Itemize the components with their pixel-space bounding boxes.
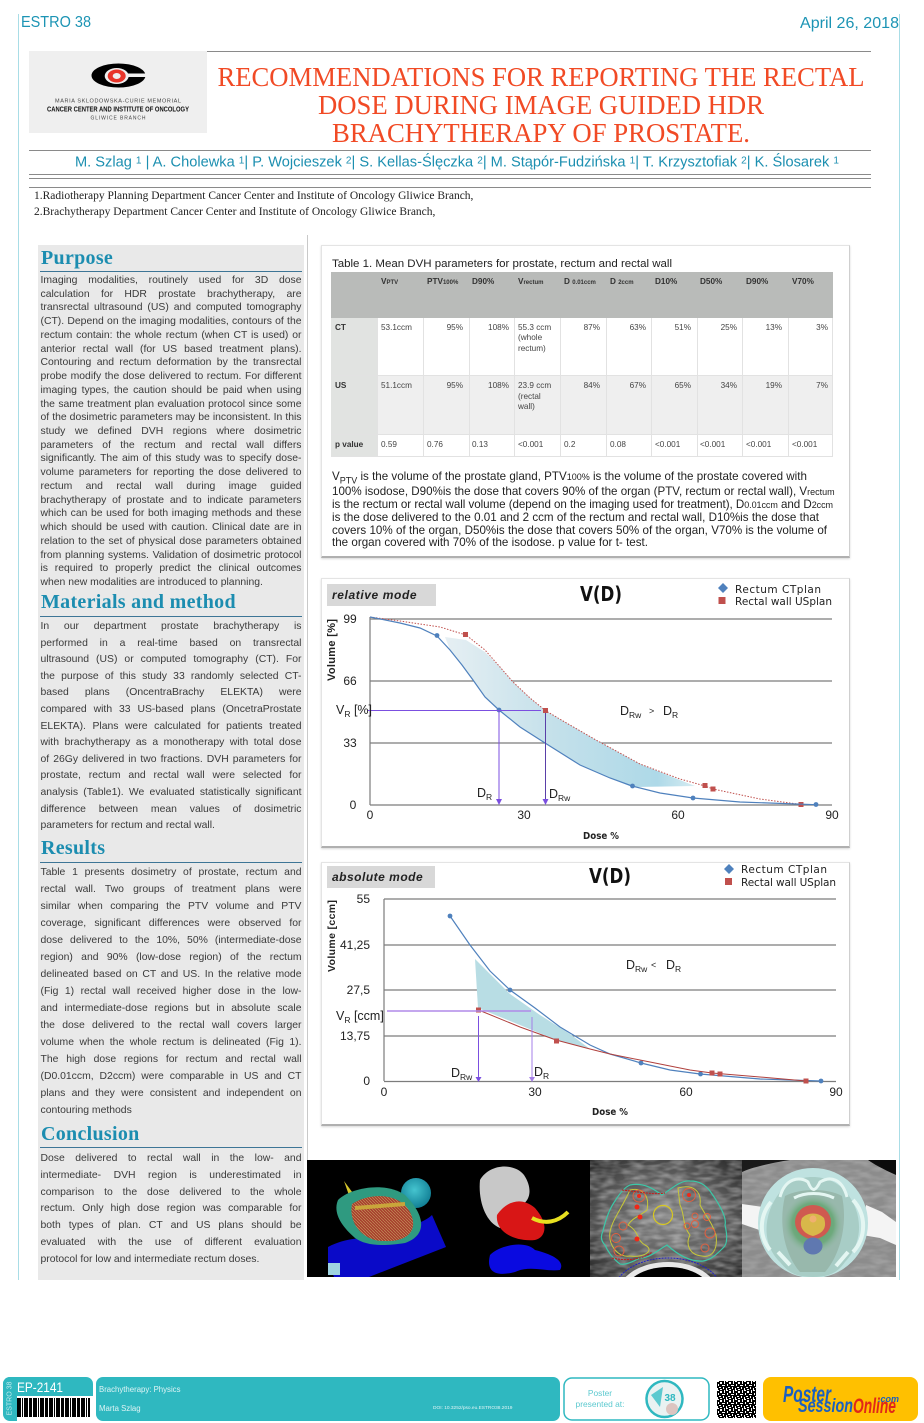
authors: 2 xyxy=(477,156,483,166)
rectum curve xyxy=(448,914,823,1083)
heading: Purpose: Purpose xyxy=(41,247,113,269)
axis labels: 27,5 xyxy=(347,983,370,997)
table 1: (whole xyxy=(518,333,543,342)
chart title: V(D) xyxy=(589,864,631,888)
panel: table 1 xyxy=(321,245,850,558)
text block: Purpose: imaging types, the caution should be paid when using xyxy=(40,385,302,396)
table 1: <0.001 xyxy=(746,440,772,449)
annotations: Rw xyxy=(460,1072,473,1082)
axis labels: 60 xyxy=(679,1085,693,1099)
axis labels: 30 xyxy=(528,1085,542,1099)
poster number: EP-2141 xyxy=(17,1380,63,1395)
table 1: 65% xyxy=(675,381,691,390)
text block: Purpose: relation to the set of physical dose parameters obtained xyxy=(40,536,302,547)
heading: Results: Results xyxy=(41,837,105,859)
text block: Purpose: from planning systems. Validation of dosimetric protocol xyxy=(40,550,302,561)
annotations: D xyxy=(626,958,635,972)
text block: Conclusion: evaluated with the use of different evaluation xyxy=(40,1237,302,1248)
text block: Purpose: of the dosimetric parameters may be inconsistent. In this xyxy=(40,412,302,423)
table 1: 108% xyxy=(488,323,509,332)
authors: | T. Krzysztofiak xyxy=(635,154,741,170)
authors xyxy=(75,152,839,170)
table footnote: 100% isodose, D90%is the dose that covers 90% of the organ (PTV, rectum or rectal wall), Vrectum xyxy=(332,485,835,498)
authors: | M. Stąpór-Fudzińska xyxy=(483,154,630,170)
authors: 1 xyxy=(630,156,636,166)
table 1: D 2ccm xyxy=(610,277,634,286)
affiliations: 2.Brachytherapy Department Cancer Center and Institute of Oncology Gliwice Branch, xyxy=(34,206,435,218)
table footnote: covers 10% of the organ, D50%is the dose that covers 50% of the organ, V70% is the volume of xyxy=(332,524,827,537)
table 1: 25% xyxy=(721,323,737,332)
CT scan with dose overlay xyxy=(742,1160,896,1278)
text block: Results: (D0.01ccm, D2ccm) were comparable in US and CT xyxy=(40,1071,302,1082)
annotations: Rw xyxy=(635,964,648,974)
authors: 2 xyxy=(346,156,352,166)
axis labels xyxy=(326,892,843,1118)
annotations: R xyxy=(543,1071,549,1081)
conference name: ESTRO 38 xyxy=(21,14,91,31)
3D model right xyxy=(480,1167,568,1274)
axis labels: 90 xyxy=(829,1085,843,1099)
footer: topic and author bar: DOI: 10.3252/pso.eu.ESTRO38.2019 xyxy=(433,1406,512,1411)
affiliations: 1.Radiotherapy Planning Department Cancer Center and Institute of Oncology Gliwice Branch, xyxy=(34,190,473,202)
text block: Conclusion: intermediate- DVH region is underestimated in xyxy=(40,1170,302,1181)
text block: Conclusion: comparison to the dose delivered to the whole xyxy=(40,1187,302,1198)
table 1: D10% xyxy=(655,277,678,286)
text block: Materials and method: ultrasound (US) or computed tomography (CT). For xyxy=(40,654,302,665)
table 1: 87% xyxy=(584,323,600,332)
axis labels: 13,75 xyxy=(340,1029,370,1043)
text block: Materials and method: In our department prostate brachytherapy is xyxy=(40,621,302,632)
axis labels: 0 xyxy=(381,1085,388,1099)
axis labels: 41,25 xyxy=(340,938,370,952)
rectal wall curve xyxy=(476,1008,808,1084)
text block: Results: plans and they were consistent and independent on xyxy=(40,1088,302,1099)
authors: | K. Ślosarek xyxy=(747,152,833,170)
axis labels: 60 xyxy=(671,808,685,822)
table 1: 0.13 xyxy=(472,440,488,449)
table 1: <0.001 xyxy=(700,440,726,449)
table 1: CT xyxy=(335,323,346,332)
text block: Results: rectal wall. Two groups of treatment plans were xyxy=(40,884,302,895)
text block: Purpose: the same treatment plan evaluation protocol since some xyxy=(40,399,302,410)
grid and axes xyxy=(384,899,836,1082)
table 1: (rectal xyxy=(518,392,541,401)
annotations: R xyxy=(675,964,681,974)
table 1: 63% xyxy=(630,323,646,332)
table 1: rectum) xyxy=(518,344,546,353)
3D model left xyxy=(328,1178,446,1277)
axis labels: Volume [%] xyxy=(326,619,338,681)
authors: 1 xyxy=(136,156,142,166)
rectal wall curve xyxy=(370,617,804,807)
text block: Materials and method: difference between mean values of dosimetric xyxy=(40,804,302,815)
footer: poster presented at: presented at: xyxy=(576,1399,624,1409)
text block: Purpose: Imaging modalities, routinely used for 3D dose xyxy=(40,275,302,286)
table 1: <0.001 xyxy=(518,440,544,449)
date: April 26, 2018 xyxy=(800,15,899,32)
authors: 2 xyxy=(741,156,747,166)
panel: left text column xyxy=(38,245,304,1280)
grid and axes xyxy=(370,617,832,805)
annotations: R xyxy=(344,709,350,719)
id block background xyxy=(3,1377,93,1396)
axis labels: Volume [ccm] xyxy=(326,900,338,972)
text block: Purpose: Contouring and rectum deformation by the transrectal xyxy=(40,357,302,368)
table footnote: VPTV is the volume of the prostate gland, PTV100% is the volume of the prostate covered with xyxy=(332,470,807,485)
text block: Results xyxy=(40,867,302,1116)
text block: Materials and method xyxy=(40,621,302,831)
text block: Purpose: which can be used for both imaging methods and these xyxy=(40,508,302,519)
table 1: 84% xyxy=(584,381,600,390)
footer: poster presented at xyxy=(563,1377,710,1421)
footer: PosterSessionOnline logo: Session xyxy=(798,1396,853,1417)
text block: Purpose: rectum contain: the whole rectum (when CT is used) or xyxy=(40,330,302,341)
affiliations xyxy=(34,190,473,218)
annotations xyxy=(336,958,681,1082)
table 1: 51% xyxy=(675,323,691,332)
legend: Rectum CTplan xyxy=(735,584,821,596)
rectum curve xyxy=(370,617,818,807)
text block: Results: the dose delivered to the rectal wall covers larger xyxy=(40,1020,302,1031)
annotations: [%] xyxy=(350,703,372,717)
footer: poster id block: ESTRO 38 xyxy=(6,1382,14,1415)
table 1: D50% xyxy=(700,277,723,286)
panel: chart absolute mode xyxy=(321,862,850,1126)
table 1: 55.3 ccm xyxy=(518,323,551,332)
annotations: D xyxy=(663,704,672,718)
text block: Results: Table 1 presents dosimetry of prostate, rectum and xyxy=(40,867,302,878)
table 1: wall) xyxy=(517,402,535,411)
text block: Materials and method: prostate, rectum and rectal wall were selected for xyxy=(40,770,302,781)
table footnote: is the dose delivered to the 0.01 and 2 ccm of the rectum and rectal wall, D10%is the dose that xyxy=(332,511,819,524)
text block: Purpose xyxy=(40,275,302,588)
table footnote: the organ covered with 70% of the isodose. p value for t- test. xyxy=(332,536,648,548)
text block: Purpose: calculation for HDR prostate brachytherapy, are xyxy=(40,289,302,300)
title: BRACHYTHERAPY OF PROSTATE. xyxy=(332,118,750,148)
table 1: 95% xyxy=(447,381,463,390)
vertical strip with conference label xyxy=(3,1377,17,1421)
mode label xyxy=(327,584,436,606)
axis labels: 30 xyxy=(517,808,531,822)
text block: Purpose: probe modify the dose delivered to rectum. For different xyxy=(40,371,302,382)
text block: Results: delineated based on CT and US. In the relative mode xyxy=(40,969,302,980)
table 1: PTV100% xyxy=(427,277,459,286)
text block: Purpose: which should be used with caution. Clinical date are in xyxy=(40,522,302,533)
text block: Purpose: is required to properly predict the clinical outcomes xyxy=(40,563,302,574)
footer: topic and author bar xyxy=(96,1377,560,1421)
text block: Results: region) and 90% (low-dose region) of the rectum xyxy=(40,952,302,963)
institution logo xyxy=(29,51,207,133)
text block: Results: dose delivered to the 10%, 50% (intermediate-dose xyxy=(40,935,302,946)
annotations: Rw xyxy=(558,793,571,803)
table 1: D90% xyxy=(746,277,769,286)
table 1: VPTV xyxy=(381,277,398,286)
axis labels: 55 xyxy=(357,892,370,906)
legend: Rectum CTplan xyxy=(741,864,827,876)
authors: 1 xyxy=(833,156,839,166)
guide arrows xyxy=(387,1011,535,1082)
annotations xyxy=(336,703,678,803)
legend: Rectal wall USplan xyxy=(741,877,836,889)
footer: topic and author bar: Marta Szlag xyxy=(99,1404,141,1413)
text block: Purpose: anterior rectal wall (for US based treatment plans). xyxy=(40,344,302,355)
table 1: D90% xyxy=(472,277,495,286)
table 1: V70% xyxy=(792,277,815,286)
text block: Results: similar when comparing the PTV volume and PTV xyxy=(40,901,302,912)
text block: Results: and intermediate-dose regions but in absolute scale xyxy=(40,1003,302,1014)
text block: Conclusion: rectum. Only high dose region was comparable for xyxy=(40,1203,302,1214)
text block: Conclusion: both types of plan. CT and US plans should be xyxy=(40,1220,302,1231)
table 1: 95% xyxy=(447,323,463,332)
image strip: 3D models and planning scans xyxy=(307,1160,896,1277)
authors: | P. Wojcieszek xyxy=(244,154,346,170)
axis labels: 99 xyxy=(343,612,357,626)
text block: Materials and method: the purpose of this study 33 randomly selected CT- xyxy=(40,671,302,682)
text block: Materials and method: with brachytherapy as a monotherapy with total dose xyxy=(40,737,302,748)
footer: PosterSessionOnline logo: Poster xyxy=(783,1381,832,1407)
text block: Materials and method: of 26Gy delivered in two fractions. DVH parameters for xyxy=(40,754,302,765)
title: RECOMMENDATIONS FOR REPORTING THE RECTAL xyxy=(218,62,864,92)
axis labels: Dose % xyxy=(592,1107,628,1118)
annotations: D xyxy=(549,787,558,801)
guide arrows xyxy=(368,710,548,805)
table 1: 53.1ccm xyxy=(381,323,412,332)
table 1: 19% xyxy=(766,381,782,390)
text block: Purpose: rectum and rectal wall during image guided xyxy=(40,481,302,492)
table 1: 13% xyxy=(766,323,782,332)
table 1: 0.2 xyxy=(564,440,576,449)
annotations: D xyxy=(477,786,486,800)
axis labels xyxy=(326,612,839,842)
table 1: 7% xyxy=(816,381,828,390)
text block: Materials and method: analysis (Table1). We evaluated statistically significant xyxy=(40,787,302,798)
text block: Materials and method: performed in a real-time based on transrectal xyxy=(40,638,302,649)
annotations: V xyxy=(336,1009,344,1023)
axis labels: 66 xyxy=(343,674,357,688)
table 1: 0.59 xyxy=(381,440,397,449)
annotations: Rw xyxy=(629,710,642,720)
chart title: V(D) xyxy=(580,582,622,606)
institution logo: MARIA SKLODOWSKA-CURIE MEMORIAL xyxy=(55,98,181,104)
panel: chart relative mode xyxy=(321,578,850,848)
annotations: < xyxy=(651,960,656,970)
text block: Results: volume when the whole rectum is delineated (Fig 1). xyxy=(40,1037,302,1048)
annotations: R xyxy=(344,1015,350,1025)
footer: QR code xyxy=(717,1381,756,1418)
text block: Purpose: significantly. The aim of this study was to specify dose- xyxy=(40,453,302,464)
text block: Purpose: volume parameters for reporting the dose delivered to xyxy=(40,467,302,478)
mode label: absolute mode xyxy=(332,870,423,884)
table 1: Vrectum xyxy=(518,277,543,286)
text block: Materials and method: ELEKTA). Plans were calculated for patients treated xyxy=(40,721,302,732)
text block: Results: (Fig 1) rectal wall received higher dose in the low- xyxy=(40,986,302,997)
table 1: Table 1. Mean DVH parameters for prostate, rectum and rectal wall xyxy=(332,258,672,270)
annotations: D xyxy=(620,704,629,718)
mode label xyxy=(327,866,435,888)
text block: Results: contouring methods xyxy=(40,1105,132,1116)
footer: poster id block xyxy=(3,1377,93,1421)
table 1: D 0.01ccm xyxy=(564,277,596,286)
text block: Purpose: parameters of the rectum and rectal wall differs xyxy=(40,440,302,451)
text block: Conclusion xyxy=(40,1153,302,1265)
table footnote xyxy=(332,470,835,548)
text block: Materials and method: compared with 33 US-based plans (OncetraProstate xyxy=(40,704,302,715)
annotations: V xyxy=(336,703,344,717)
text block: Conclusion: protocol for low and intermediate rectum doses. xyxy=(40,1254,259,1265)
table 1: 23.9 ccm xyxy=(518,381,551,390)
table 1: p value xyxy=(335,440,364,449)
title: DOSE DURING IMAGE GUIDED HDR xyxy=(318,90,764,120)
table 1: 51.1ccm xyxy=(381,381,412,390)
text block: Results: The high dose regions for rectum and rectal wall xyxy=(40,1054,302,1065)
authors: 1 xyxy=(239,156,245,166)
ultrasound scan with isodose contours xyxy=(590,1160,742,1277)
title xyxy=(218,62,864,148)
footer: PosterSessionOnline logo: Online xyxy=(853,1395,896,1418)
footer: PosterSessionOnline logo xyxy=(763,1377,918,1421)
heading: Materials and method: Materials and method xyxy=(41,591,236,613)
annotations: R xyxy=(672,710,678,720)
text block: Purpose: (CT). Depend on the imaging modalities, contours of the xyxy=(40,316,302,327)
text block: Purpose: transrectal ultrasound (US) and computed tomography xyxy=(40,302,302,313)
mode label: relative mode xyxy=(332,588,417,602)
legend xyxy=(718,583,832,608)
shaded area xyxy=(475,959,590,1049)
footer: poster presented at: Poster xyxy=(588,1388,612,1398)
text block: Materials and method: based plans (OncentraBrachy ELEKTA) were xyxy=(40,687,302,698)
annotations: D xyxy=(451,1066,460,1080)
table 1: US xyxy=(335,381,347,390)
table footnote: is the rectum or rectal wall volume (depend on the imaging used for treatment), D0.01ccm and D2ccm xyxy=(332,498,833,511)
annotations: D xyxy=(534,1065,543,1079)
text block: Materials and method: parameters for rectum and rectal wall. xyxy=(40,820,215,831)
footer: PosterSessionOnline logo: .com xyxy=(878,1394,899,1404)
text block: Results: coverage, significant differences were observed for xyxy=(40,918,302,929)
text block: Conclusion: Dose delivered to rectal wall in the low- and xyxy=(40,1153,302,1164)
table 1: 3% xyxy=(816,323,828,332)
authors: | S. Kellas-Ślęczka xyxy=(352,152,477,170)
axis labels: 0 xyxy=(367,808,374,822)
table 1: 108% xyxy=(488,381,509,390)
axis labels: Dose % xyxy=(583,831,619,842)
axis labels: 0 xyxy=(363,1074,370,1088)
axis labels: 90 xyxy=(825,808,839,822)
table 1: 0.08 xyxy=(610,440,626,449)
footer: poster presented at: 38 xyxy=(664,1393,676,1404)
table 1: 34% xyxy=(721,381,737,390)
table 1: 67% xyxy=(630,381,646,390)
authors: | A. Cholewka xyxy=(142,154,239,170)
shaded area xyxy=(445,637,695,787)
authors: M. Szlag xyxy=(75,154,131,170)
axis labels: 0 xyxy=(350,798,357,812)
heading: Conclusion: Conclusion xyxy=(41,1123,140,1145)
axis labels: 33 xyxy=(343,736,357,750)
barcode xyxy=(17,1398,90,1417)
table 1: <0.001 xyxy=(655,440,681,449)
annotations: R xyxy=(486,792,492,802)
table 1 xyxy=(331,258,833,457)
footer: topic and author bar: Brachytherapy: Physics xyxy=(99,1385,180,1394)
annotations: D xyxy=(666,958,675,972)
chart: absolute mode V(D) xyxy=(326,864,843,1118)
text block: Purpose: when new modalities are introduced to planning. xyxy=(40,577,263,588)
table 1: 0.76 xyxy=(427,440,443,449)
legend: Rectal wall USplan xyxy=(735,596,832,608)
table 1: <0.001 xyxy=(792,440,818,449)
annotations: [ccm] xyxy=(350,1009,384,1023)
legend xyxy=(724,864,836,889)
chart: relative mode V(D) xyxy=(326,582,839,842)
text block: Purpose: brachytherapy of prostate and to indicate parameters xyxy=(40,495,302,506)
annotations: > xyxy=(649,706,654,716)
institution logo: GLIWICE BRANCH xyxy=(90,116,146,122)
text block: Purpose: study we defined DVH regions where dosimetric xyxy=(40,426,302,437)
